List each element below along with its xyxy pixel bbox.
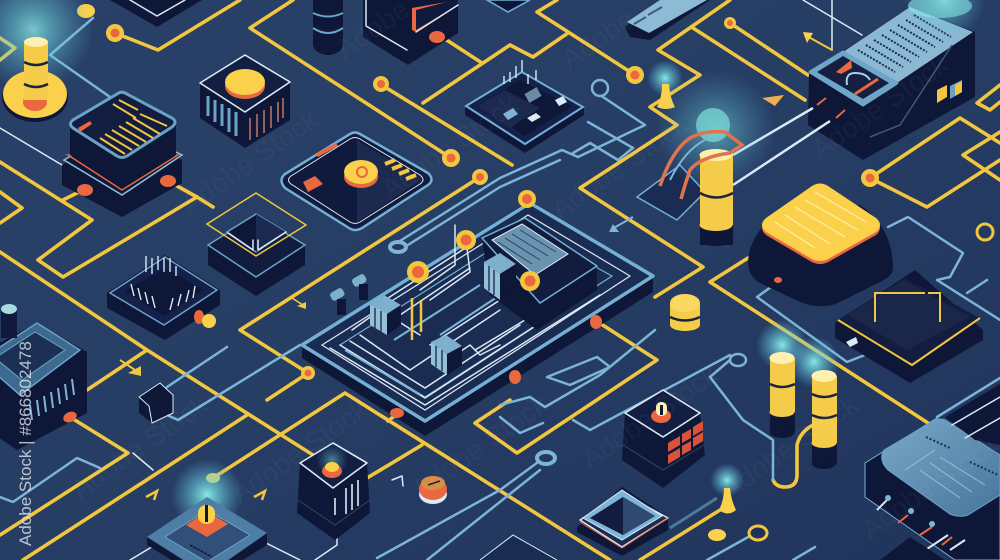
watermark: diagonal: Adobe [556,3,640,75]
chip: coin panel [282,132,432,230]
small cylinder [670,294,700,331]
watermark: diagonal: Adobe Stock [856,428,1000,545]
hook mark [392,476,403,486]
arrow head [803,32,813,43]
watermark: vertical: Adobe Stock | #866802478 [16,341,35,546]
strip: top light blue [625,0,710,40]
cables [733,108,830,185]
small lamp: top center [647,60,683,109]
block: top with panel [363,0,458,65]
chip: yellow button block [200,55,290,148]
chip: bottom with warning [147,459,267,560]
cube: warning with bricks [622,390,705,488]
watermark: diagonal: Adobe Stock [226,393,374,510]
chip: yellow bracket [835,270,983,383]
chip: bottom pyramid [577,487,668,556]
lamp: top left yellow [0,0,93,122]
watermark: diagonal: Adobe Stock [406,388,554,505]
coil component [194,310,216,328]
watermark: diagonal: Adobe Stock [806,48,954,165]
device: keyboard [808,0,975,160]
watermark: diagonal: Adobe Stock [176,103,324,220]
coin [419,476,447,504]
watermark: diagonal: Adobe Stock [576,358,724,475]
chip: list display [62,92,182,217]
chip: top left cut-off [110,0,202,27]
small lamp: bottom right [710,463,744,514]
lamp pair [756,319,840,469]
board: bottom edge [480,535,557,560]
arrow: yellow right [120,360,141,376]
watermark: diagonal: Adobe Stock [66,388,214,505]
cube: striped lamp [297,443,370,540]
triangle marker [762,95,784,106]
side connectors [329,273,368,315]
arrow: small yellow [292,298,306,309]
block: left heat sink [0,304,87,450]
arrows: bottom chip sides [146,491,265,500]
watermark: diagonal: Adobe Stock [716,388,864,505]
watermark: diagonal: Adobe Stock [546,108,694,225]
main circuit board [302,190,653,436]
watermark: diagonal: Adobe Stock [376,88,524,205]
chip: data panel [465,60,584,153]
arrow: yellow up-left [805,35,832,50]
chip: pin socket [107,255,220,340]
small block [139,383,173,423]
glow: keyboard [905,0,985,40]
device: bottom right [865,418,1000,560]
chip: top tiny [487,0,530,12]
grey trace [670,498,717,528]
chip: yellow outline pyramid [207,193,306,296]
plate with candle [637,70,776,246]
right side strips [945,384,1000,445]
arrow: blue [609,217,633,232]
yellow pillow [748,184,893,306]
cylinder: top [313,0,343,55]
